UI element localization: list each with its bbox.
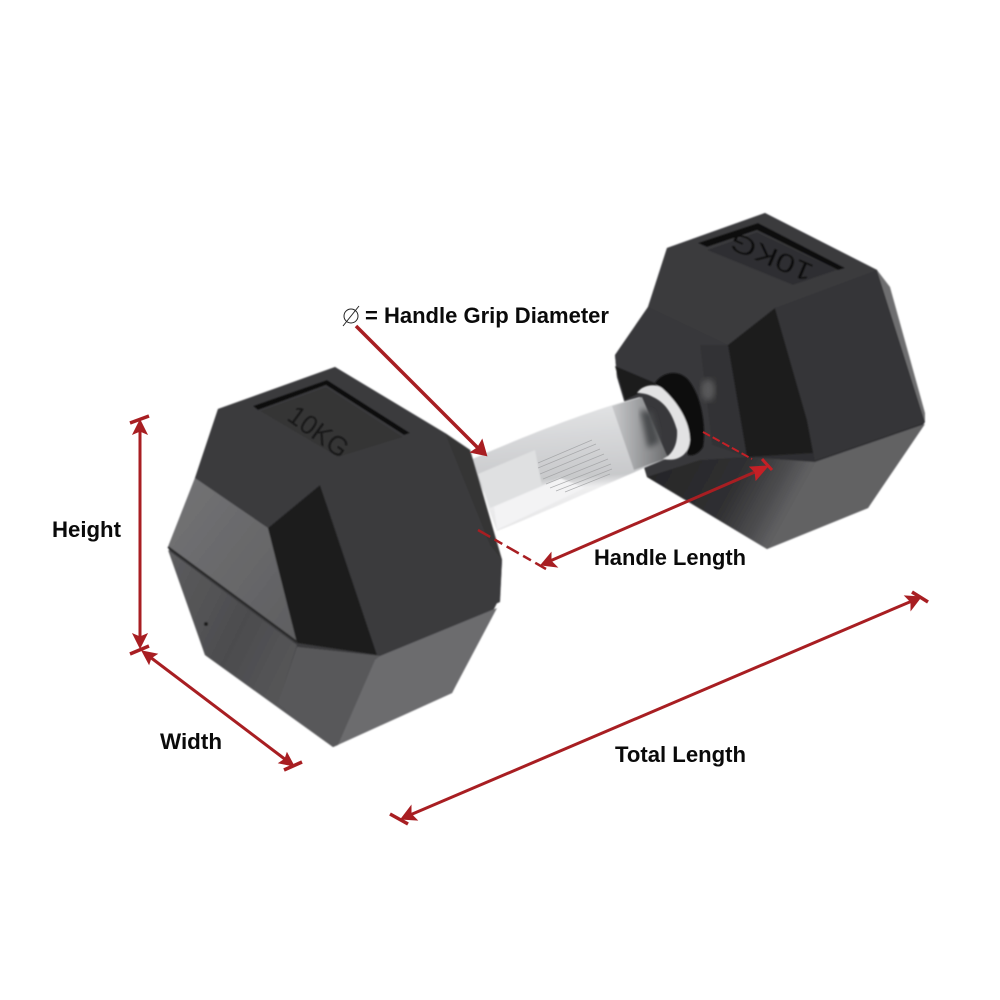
dashed guide: handle start xyxy=(478,530,546,569)
arrow: grip diameter pointer xyxy=(356,326,486,455)
arrow: width xyxy=(142,651,302,770)
dumbbell photo xyxy=(168,213,925,747)
black collar xyxy=(655,373,704,455)
label: diameter symbol xyxy=(343,306,359,326)
arrow: total length xyxy=(390,592,928,824)
upper face xyxy=(195,367,445,528)
light sliver xyxy=(877,270,925,422)
label: handle length: Handle Length xyxy=(594,545,746,570)
label: height: Height xyxy=(52,517,122,542)
handle knurling xyxy=(538,440,612,492)
dashed guide: handle end xyxy=(703,432,752,459)
dark chamfer xyxy=(728,308,813,457)
dimension arrows xyxy=(130,326,928,824)
washer xyxy=(637,385,690,460)
right hex weight: 10KG xyxy=(725,226,818,288)
left light facet xyxy=(168,478,297,643)
lower right facet xyxy=(278,608,497,747)
label: total length: Total Length xyxy=(615,742,746,767)
logo plate: 10KG left xyxy=(253,380,410,435)
label: handle grip diameter: = Handle Grip Diameter xyxy=(365,303,609,328)
label: width: Width xyxy=(160,729,222,754)
lower-left facet xyxy=(168,550,333,747)
upper face xyxy=(648,213,877,345)
hub face around handle xyxy=(615,307,747,477)
right hex weight xyxy=(615,213,925,549)
left hex weight: 10KG xyxy=(282,400,355,464)
arrow: handle length xyxy=(541,459,772,567)
front face xyxy=(320,433,502,655)
front face xyxy=(775,270,925,460)
lower facets xyxy=(647,457,815,549)
logo plate: 10KG right xyxy=(698,223,845,270)
seam xyxy=(168,547,297,642)
left hex weight xyxy=(168,367,502,747)
handle xyxy=(470,373,704,531)
arrow: height xyxy=(130,416,149,654)
dark chamfer xyxy=(268,485,377,655)
